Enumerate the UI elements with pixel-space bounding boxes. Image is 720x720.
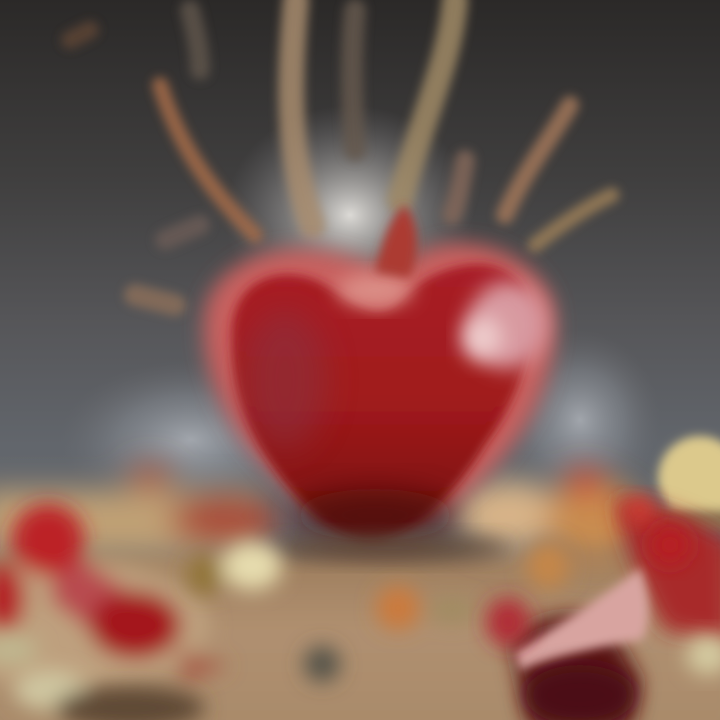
food: centre yellow pieces bbox=[187, 541, 570, 682]
left shaded face bbox=[243, 310, 327, 450]
bright centre highlight bbox=[337, 274, 413, 306]
right white highlight bbox=[468, 281, 548, 369]
lower dark base bbox=[295, 489, 455, 541]
horizon band of blurred food bbox=[0, 464, 645, 560]
splash streaks bbox=[70, 0, 612, 305]
heart body bbox=[232, 265, 529, 540]
background glow bbox=[60, 105, 660, 520]
food: left strawberries bbox=[0, 504, 230, 690]
apple stem bbox=[375, 205, 417, 278]
food: lower left pale pieces bbox=[0, 636, 205, 720]
apple heart bbox=[204, 205, 555, 541]
pale halo of heart bbox=[204, 243, 555, 524]
shadow under heart bbox=[270, 534, 510, 562]
table surface bbox=[0, 552, 720, 720]
food: right cut apple bbox=[486, 496, 720, 720]
food: right pale fruit bbox=[655, 436, 720, 532]
